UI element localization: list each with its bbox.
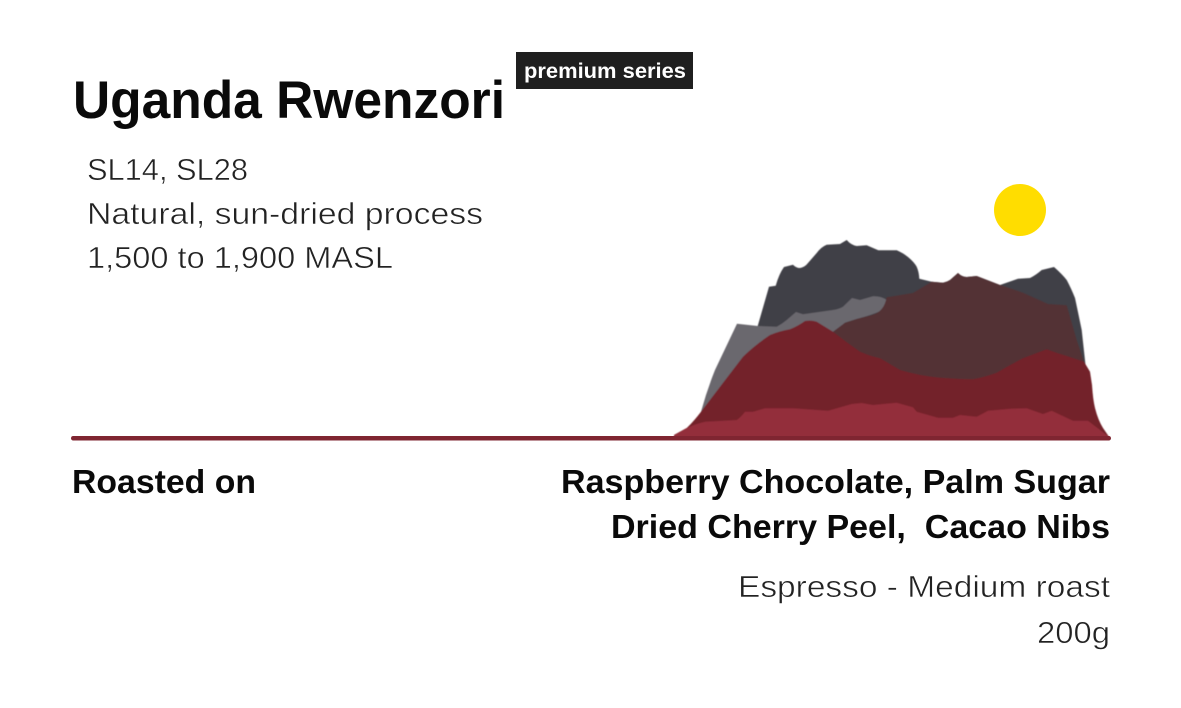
back mountain layer: [758, 240, 1086, 420]
roast and weight: 200g: [1037, 615, 1110, 650]
roast and weight: Espresso - Medium roast: [738, 569, 1110, 604]
badge: premium series: premium series: [524, 60, 686, 83]
brown mountain layer: [833, 273, 1084, 400]
roast and weight: [738, 569, 1110, 650]
tasting notes: Raspberry Chocolate, Palm Sugar: [561, 463, 1110, 500]
mountain altitude chart: [674, 240, 1109, 438]
title: Uganda Rwenzori: [73, 71, 505, 130]
coffee details: 1,500 to 1,900 MASL: [87, 240, 393, 275]
coffee details: SL14, SL28: [87, 152, 248, 187]
icon: sun: [994, 184, 1046, 236]
badge: premium series: [516, 52, 693, 89]
coffee details: [87, 152, 483, 275]
baseline: [71, 436, 1111, 440]
tasting notes: [561, 463, 1110, 545]
coffee details: Natural, sun-dried process: [87, 196, 483, 231]
tasting notes: Dried Cherry Peel, Cacao Nibs: [611, 508, 1110, 545]
roasted on label: Roasted on: [72, 463, 256, 500]
front mountain layer: [674, 403, 1109, 438]
gray mountain layer: [701, 296, 887, 420]
red mountain layer: [674, 321, 1109, 438]
